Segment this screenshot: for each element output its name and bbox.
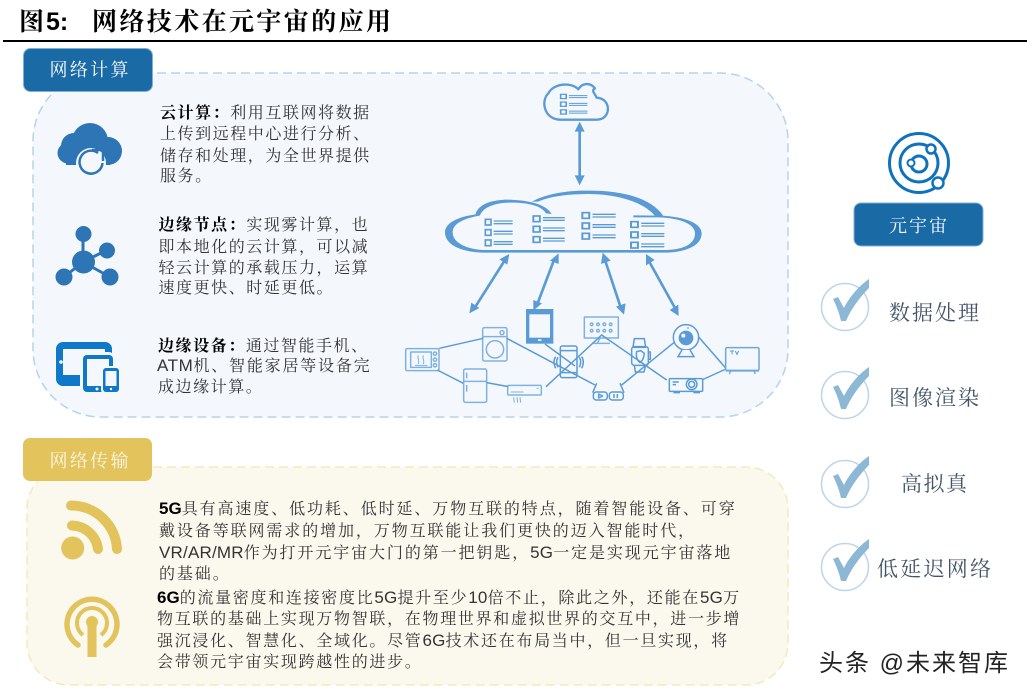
text: cloud computing: 服务。 xyxy=(160,167,213,185)
title: 网络技术在元宇宙的应用 xyxy=(92,8,393,36)
device connections xyxy=(437,335,726,387)
text: 6G: 物互联的基础上实现万物智联，在物理世界和虚拟世界的交互中，进一步增 xyxy=(157,610,741,628)
item: high fidelity: 高拟真 xyxy=(901,472,968,496)
item: low latency network: 低延迟网络 xyxy=(877,558,991,581)
text: edge devices: 边缘设备：通过智能手机、 xyxy=(158,337,369,355)
arrow: top cloud to edge cloud xyxy=(575,122,585,185)
title: 图 xyxy=(19,8,44,36)
text: 6G xyxy=(157,588,741,671)
item: image rendering xyxy=(822,367,979,418)
icon: webcam xyxy=(673,325,699,357)
title: 5: xyxy=(46,8,68,36)
item: high fidelity xyxy=(822,456,968,508)
text: 6G: 6G的流量密度和连接密度比5G提升至少10倍不止，除此之外，还能在5G万 xyxy=(157,588,741,607)
icon: 6G antenna xyxy=(67,599,117,657)
text: cloud computing: 上传到远程中心进行分析、 xyxy=(160,125,371,143)
icon: edge node network xyxy=(56,226,118,286)
icon: cloud refresh xyxy=(58,123,122,178)
text: 5G: 5G具有高速度、低功耗、低时延、万物互联的特点，随着智能设备、可穿 xyxy=(159,499,737,518)
icon: tablet xyxy=(526,309,553,344)
text: edge devices: ATM机、智能家居等设备完 xyxy=(157,356,371,375)
text: cloud computing: 储存和处理，为全世界提供 xyxy=(160,146,371,165)
label: metaverse: 元宇宙 xyxy=(889,216,947,236)
icon: control panel xyxy=(584,317,618,343)
text: 5G xyxy=(159,499,737,583)
icon: smart watch xyxy=(632,339,650,372)
text: edge nodes: 轻云计算的承载压力，运算 xyxy=(158,259,369,277)
text: 5G: VR/AR/MR作为打开元宇宙大门的第一把钥匙，5G一定是实现元宇宙落地 xyxy=(159,543,732,562)
label: network computing: 网络计算 xyxy=(50,60,128,80)
icon: microwave xyxy=(406,349,439,371)
icon: metaverse orbit xyxy=(890,134,948,192)
text: edge nodes: 边缘节点：实现雾计算，也 xyxy=(158,215,369,234)
text: edge nodes: 速度更快、时延更低。 xyxy=(158,279,334,297)
arrows: edge cloud to devices xyxy=(469,253,679,316)
icon: washing machine xyxy=(483,328,507,361)
icon: edge cloud xyxy=(445,191,702,253)
label: network transmission xyxy=(23,438,152,481)
icon: projector xyxy=(669,379,703,393)
text: edge devices: 成边缘计算。 xyxy=(158,378,263,396)
text: edge devices xyxy=(157,337,371,396)
text: cloud computing xyxy=(160,103,371,185)
text: 5G: 戴设备等联网需求的增加，万物互联能让我们更快的迈入智能时代， xyxy=(159,522,696,540)
icon: edge devices xyxy=(56,342,120,393)
text: 6G: 强沉浸化、智慧化、全域化。尽管6G技术还在布局当中，但一旦实现，将 xyxy=(157,631,729,650)
icon: fridge xyxy=(464,369,487,402)
label: network computing xyxy=(24,48,152,92)
panel: network computing xyxy=(24,48,788,417)
icon: phone xyxy=(554,346,583,378)
icon: VR glasses xyxy=(593,383,624,400)
text: 6G: 会带领元宇宙实现跨越性的进步。 xyxy=(157,653,423,671)
label: network transmission: 网络传输 xyxy=(50,451,128,471)
text: 5G: 的基础。 xyxy=(159,565,231,583)
watermark: 头条 @未来智库 xyxy=(819,650,1008,677)
icon: top cloud xyxy=(544,84,608,120)
text: edge nodes: 即本地化的云计算，可以减 xyxy=(158,237,369,256)
item: data processing xyxy=(822,279,979,330)
item: image rendering: 图像渲染 xyxy=(889,387,979,410)
panel: network transmission xyxy=(23,438,788,685)
icon: air conditioner xyxy=(508,385,541,403)
item: data processing: 数据处理 xyxy=(889,302,979,325)
diagram: cloud network xyxy=(406,84,759,403)
item: low latency network xyxy=(822,539,991,590)
icon: TV xyxy=(726,348,759,374)
text: cloud computing: 云计算：利用互联网将数据 xyxy=(160,103,371,122)
label: metaverse xyxy=(854,203,983,246)
text: edge nodes xyxy=(158,215,369,297)
icon: 5G signal xyxy=(61,505,117,560)
